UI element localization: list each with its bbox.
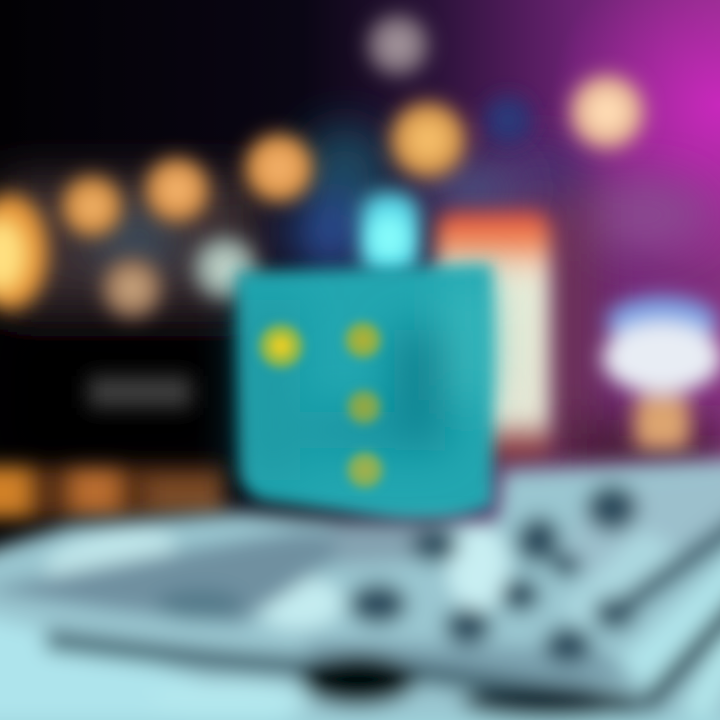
desk surface	[0, 458, 720, 720]
base under the soft bottom edge	[0, 670, 720, 720]
note edges and dark creases	[600, 515, 720, 625]
yellow wallet dots	[259, 322, 383, 488]
grey note shade	[0, 530, 390, 625]
muted haze behind bokeh lights	[0, 125, 520, 470]
bokeh lights	[0, 14, 644, 318]
teal wallet	[236, 264, 494, 521]
wallet handle	[360, 192, 420, 280]
dim label on dark card	[88, 376, 192, 408]
orange table strip	[0, 466, 225, 518]
light patches	[40, 519, 180, 593]
lamp shape	[602, 296, 720, 450]
blurred keyboard and banknotes	[0, 458, 720, 720]
colourful card	[436, 212, 550, 462]
keys	[349, 484, 638, 664]
